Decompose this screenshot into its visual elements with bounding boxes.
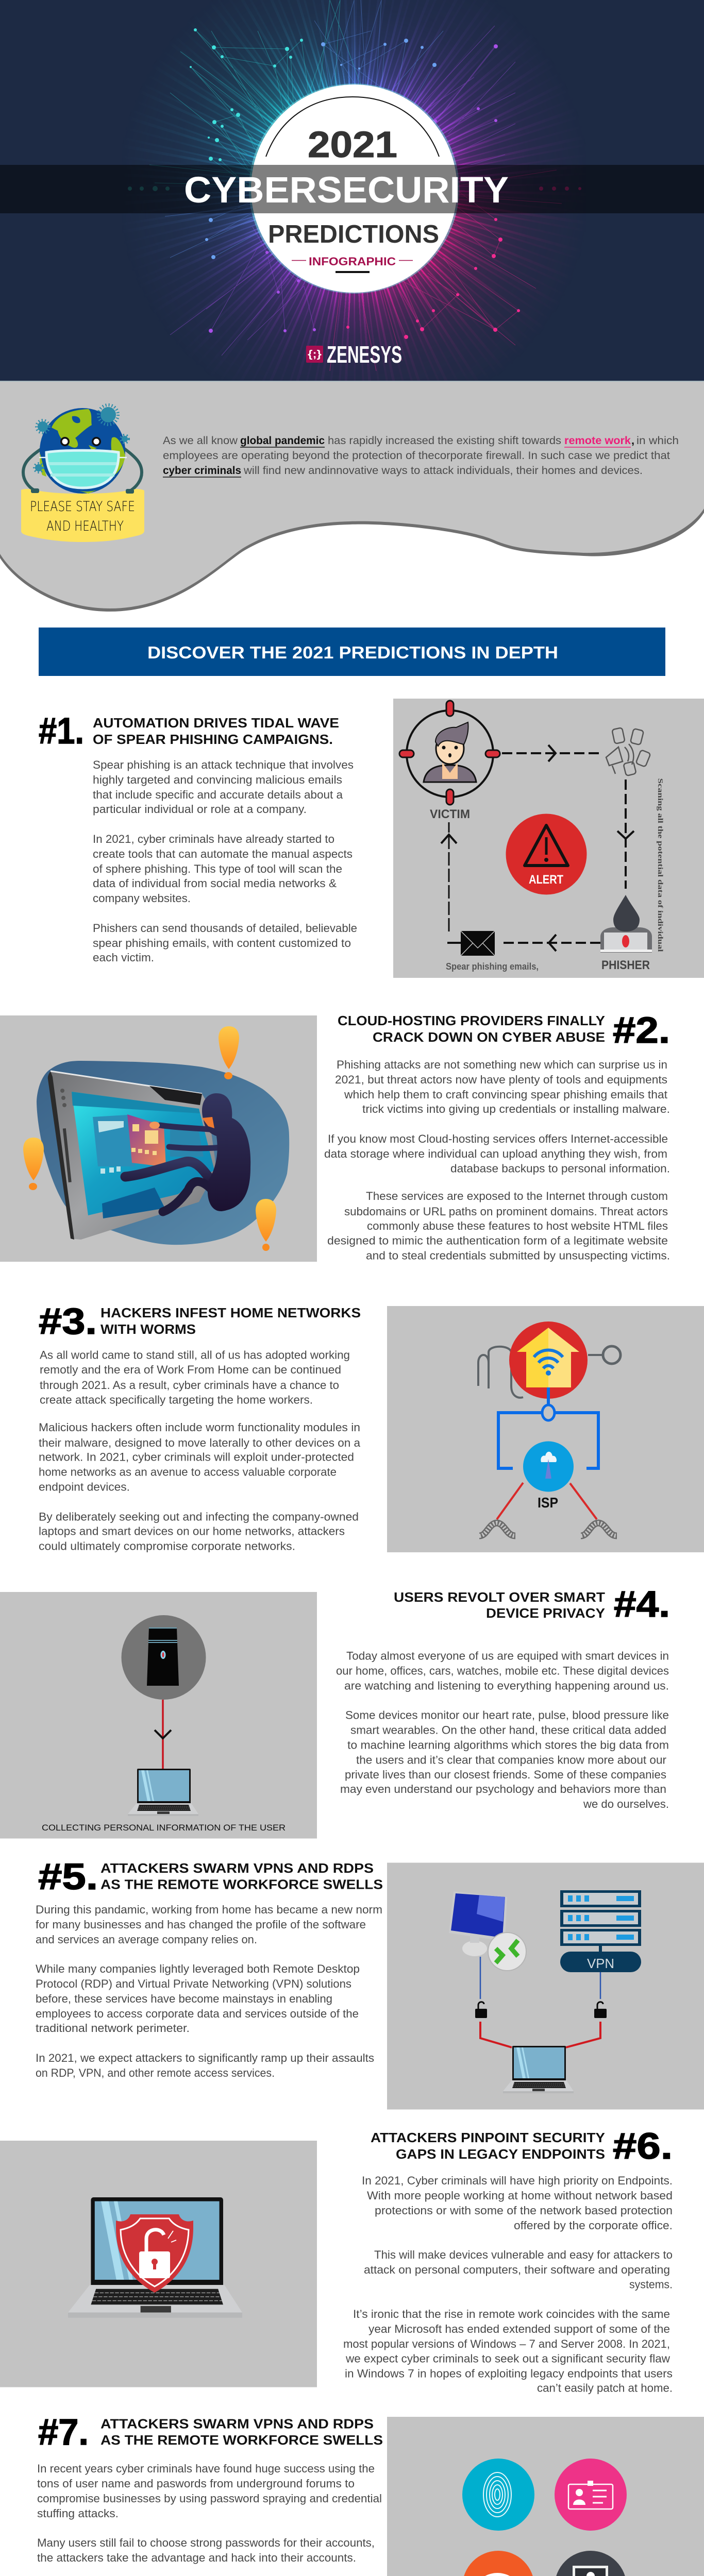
icon: victim target bbox=[399, 701, 500, 805]
hero logo bbox=[306, 341, 402, 368]
section 2 heading: CLOUD-HOSTING PROVIDERS FINALLY bbox=[338, 1013, 605, 1028]
section 4 text: Some devices monitor our heart rate, pulse, blood pressure like bbox=[345, 1709, 669, 1722]
section 5 number: #5. bbox=[38, 1857, 98, 1897]
icon: open locks bbox=[475, 2002, 607, 2018]
section 1 text: data of individual from social media networks & bbox=[93, 877, 337, 890]
panel: phishing diagram bbox=[393, 699, 704, 978]
section 1 text: create tools that can automate the manual aspects bbox=[93, 848, 353, 860]
section 7 heading: AS THE REMOTE WORKFORCE SWELLS bbox=[100, 2432, 383, 2448]
section 5 heading: ATTACKERS SWARM VPNS AND RDPS bbox=[100, 1860, 374, 1876]
panel: intro wave bbox=[0, 381, 704, 612]
infographic label: INFOGRAPHIC bbox=[309, 255, 396, 268]
section 5 text: traditional network perimeter. bbox=[36, 2022, 190, 2035]
section 6 heading: GAPS IN LEGACY ENDPOINTS bbox=[396, 2146, 605, 2162]
icon: social media megaphone bbox=[606, 727, 651, 776]
section 2 text: These services are exposed to the Internet through custom bbox=[366, 1190, 668, 1202]
section 6 text: protections or with some of the network based protection bbox=[375, 2204, 673, 2217]
section 7 text: tons of user name and paswords from underground forums to bbox=[37, 2477, 355, 2490]
section 4 heading: USERS REVOLT OVER SMART bbox=[394, 1589, 605, 1605]
section 3 heading bbox=[100, 1305, 361, 1337]
section 5 heading: AS THE REMOTE WORKFORCE SWELLS bbox=[100, 1876, 383, 1892]
section 2 text: and to steal credentials submitted by unsuspecting victims. bbox=[366, 1249, 670, 1262]
arrow: data line bbox=[155, 1700, 171, 1770]
section 1 text: Phishers can send thousands of detailed, believable bbox=[93, 922, 357, 935]
intro text: cyber criminals bbox=[163, 464, 241, 477]
section 4 text: we do ourselves. bbox=[583, 1798, 669, 1810]
section banner bbox=[39, 628, 665, 676]
section 3 text: their malware, designed to move laterally to other devices on a bbox=[39, 1436, 360, 1449]
section 5 text: While many companies lightly leveraged both Remote Desktop bbox=[36, 1962, 360, 1975]
section 1 text: Spear phishing is an attack technique that involves bbox=[93, 758, 354, 771]
section 6 text: It’s ironic that the rise in remote work coincides with the same bbox=[353, 2308, 670, 2320]
hero dark band bbox=[0, 165, 704, 213]
blob backdrop bbox=[37, 1061, 289, 1245]
hero year: 2021 bbox=[308, 125, 397, 165]
section 6 text: offered by the corporate office. bbox=[514, 2219, 673, 2232]
icon: broken shield bbox=[116, 2214, 193, 2293]
icon: alert: ALERT bbox=[529, 873, 563, 887]
icon: wifi home bbox=[509, 1321, 588, 1399]
section 4 heading: DEVICE PRIVACY bbox=[486, 1605, 605, 1621]
section 6 number: #6. bbox=[613, 2126, 673, 2167]
section 5 text: on RDP, VPN, and other remote access services. bbox=[36, 2066, 275, 2079]
icon: cables bbox=[478, 1347, 602, 1398]
section 6 text: With more people working at home without network based bbox=[367, 2189, 673, 2202]
section 1 text: company websites. bbox=[93, 892, 191, 905]
hero background with network glow bbox=[0, 0, 704, 381]
hero logo: {;} bbox=[308, 349, 322, 360]
section 7 text: the attackers take the advantage and hack into their accounts. bbox=[37, 2551, 356, 2564]
section 3 text: endpoint devices. bbox=[39, 1481, 130, 1493]
section 6 text bbox=[343, 2174, 673, 2395]
icon: masked globe with sign: PLEASE STAY SAFE bbox=[30, 499, 135, 515]
icon: exclamation marks bbox=[23, 1026, 276, 1251]
section 3 text: By deliberately seeking out and infecting the company-owned bbox=[39, 1511, 359, 1523]
panel: legacy endpoint laptop bbox=[0, 2141, 317, 2387]
intro text: , bbox=[631, 434, 634, 447]
icon: fingerprint bbox=[462, 2459, 534, 2531]
panel: authentication icons bbox=[387, 2417, 704, 2576]
section 1 text bbox=[93, 758, 357, 964]
section 5 heading bbox=[100, 1860, 383, 1892]
section 3 text: home networks as an avenue to access valuable corporate bbox=[39, 1465, 337, 1479]
section 3 text: through 2021. As a result, cyber criminals have a chance to bbox=[40, 1379, 339, 1392]
section 1 number: #1. bbox=[39, 711, 84, 752]
icon: laptop bbox=[503, 2046, 574, 2093]
section 1 text: of sphere phishing. This type of tool will scan the bbox=[93, 862, 342, 875]
arrow: phisher to email bbox=[447, 935, 600, 951]
section 4 text: the users and it’s clear that companies know more about our bbox=[356, 1754, 666, 1767]
section 4 text bbox=[336, 1650, 669, 1810]
intro text: employees are operating beyond the protection of thecorporate firewall. In such case we predict that bbox=[163, 449, 670, 462]
label: ISP: ISP bbox=[538, 1495, 558, 1511]
hero title: CYBERSECURITY bbox=[184, 170, 509, 211]
intro text: in which bbox=[636, 434, 679, 447]
section 4 text: Today almost everyone of us are equiped with smart devices in bbox=[346, 1650, 669, 1663]
panel: personal data collection bbox=[0, 1592, 317, 1838]
intro text: remote work bbox=[564, 434, 631, 447]
hero white circle bbox=[249, 83, 459, 294]
section 1 text: highly targeted and convincing malicious emails bbox=[93, 773, 342, 786]
arrow: social to phisher bbox=[617, 779, 634, 889]
icon: ISP tower bbox=[523, 1442, 574, 1492]
arrow: victim to social bbox=[502, 745, 600, 761]
section 5 text: During this pandamic, working from home has became a new norm bbox=[36, 1903, 382, 1916]
section 3 text: create attack specifically targeting the home workers. bbox=[40, 1393, 313, 1406]
worm links bbox=[497, 1483, 597, 1519]
section 2 heading bbox=[338, 1013, 605, 1045]
section 7 text: stuffing attacks. bbox=[37, 2507, 119, 2520]
section 4 text: our home, offices, cars, watches, mobile etc. These digital devices bbox=[336, 1665, 669, 1677]
intro text: As we all know bbox=[163, 434, 238, 447]
section 6 text: In 2021, Cyber criminals will have high priority on Endpoints. bbox=[362, 2174, 673, 2187]
section 1 text: that include specific and accurate details about a bbox=[93, 788, 343, 801]
section 7 heading bbox=[100, 2416, 383, 2448]
section 4 text: to machine learning algorithms which stores the big data from bbox=[347, 1739, 669, 1752]
section 5 text: and services an average company relies on. bbox=[36, 1933, 257, 1946]
icon: server tower bbox=[122, 1615, 206, 1700]
section 3 text: could ultimately compromise corporate networks. bbox=[39, 1539, 295, 1553]
icon: eye bbox=[462, 2551, 534, 2576]
section 6 text: systems. bbox=[629, 2278, 673, 2291]
section 2 text: Phishing attacks are not something new which can surprise us in bbox=[337, 1058, 667, 1071]
network burst lines and nodes bbox=[128, 0, 581, 371]
section 6 text: in Windows 7 in hopes of exploiting legacy endpoints that users bbox=[345, 2367, 673, 2380]
infographic label bbox=[292, 255, 413, 273]
icon: laptop bbox=[128, 1769, 198, 1816]
icon: worms bbox=[479, 1523, 617, 1536]
section 6 text: most popular versions of Windows – 7 and Server 2008. In 2021, bbox=[343, 2337, 670, 2350]
label: phisher: PHISHER bbox=[601, 958, 650, 972]
icon: envelope bbox=[461, 931, 495, 956]
intro text bbox=[163, 434, 679, 477]
section 6 heading bbox=[371, 2130, 605, 2162]
icon: photo ID bbox=[555, 2551, 627, 2576]
section banner: DISCOVER THE 2021 PREDICTIONS IN DEPTH bbox=[147, 643, 558, 662]
section 4 text: are watching and listening to everything happening around us. bbox=[344, 1680, 669, 1692]
section 4 text: smart wearables. On the other hand, these critical data added bbox=[350, 1724, 666, 1737]
section 2 text: data storage where individual can upload anything they wish, from bbox=[324, 1147, 667, 1160]
blue links bbox=[480, 1957, 600, 1999]
credit card bbox=[127, 1114, 166, 1167]
section 1 text: each victim. bbox=[93, 951, 154, 964]
section 2 text: 2021, but threat actors now have plenty of tools and equipments bbox=[335, 1073, 667, 1086]
section 6 text: attack on personal computers, their software and operating bbox=[364, 2263, 670, 2276]
section 2 text: subdomains or URL paths on prominent domains. Threat actors bbox=[344, 1205, 668, 1218]
label: scanning: Scaning all the potential data of individual bbox=[656, 778, 664, 952]
section 5 text: for many businesses and has changed the profile of the software bbox=[36, 1918, 366, 1931]
icon: plug bbox=[603, 1346, 621, 1364]
section 3 text bbox=[39, 1349, 360, 1553]
intro text: will find new andinnovative ways to attack individuals, their homes and devices. bbox=[243, 464, 643, 477]
arrow: email to victim bbox=[441, 822, 457, 931]
intro text: global pandemic bbox=[240, 434, 325, 447]
section 7 text: compromise businesses by using password spraying and credential bbox=[37, 2492, 382, 2505]
section 6 text: we expect cyber criminals to seek out a significant security flaw bbox=[345, 2352, 671, 2365]
network lines bbox=[498, 1387, 598, 1468]
section 2 text: database backups to personal information. bbox=[450, 1162, 670, 1175]
section 4 number: #4. bbox=[614, 1584, 670, 1625]
section 3 text: remotly and the era of Work From Home can be continued bbox=[40, 1363, 341, 1376]
section 2 text: commonly abuse these features to host website HTML files bbox=[367, 1219, 668, 1232]
section 1 heading bbox=[93, 715, 339, 747]
icon: alert bbox=[506, 814, 586, 894]
hero arc bbox=[266, 97, 439, 157]
panel: VPN and RDP diagram bbox=[387, 1863, 704, 2109]
section 1 text: spear phishing emails, with content customized to bbox=[93, 937, 351, 950]
icon: ID card bbox=[555, 2459, 627, 2531]
section 2 text: trick victims into giving up credentials or installing malware. bbox=[362, 1103, 670, 1115]
section 1 text: particular individual or role at a company. bbox=[93, 803, 307, 816]
panel: home network diagram bbox=[387, 1306, 704, 1552]
section 3 heading: HACKERS INFEST HOME NETWORKS bbox=[100, 1305, 361, 1320]
label: spear phishing emails: Spear phishing emails, bbox=[446, 961, 539, 972]
section 6 text: This will make devices vulnerable and easy for attackers to bbox=[374, 2248, 673, 2261]
section 3 text: Malicious hackers often include worm functionality modules in bbox=[39, 1421, 360, 1434]
section 2 number: #2. bbox=[613, 1010, 670, 1051]
network node bbox=[542, 1405, 555, 1420]
section 3 text: network. In 2021, cyber criminals will exploit under-protected bbox=[39, 1451, 354, 1463]
red links bbox=[480, 2022, 600, 2047]
section 4 text: private lives than our closest friends. Some of these companies bbox=[345, 1768, 666, 1781]
section 7 text: Many users still fail to choose strong passwords for their accounts, bbox=[37, 2536, 375, 2549]
intro text: has rapidly increased the existing shift towards bbox=[328, 434, 561, 447]
section 3 text: laptops and smart devices on our home networks, attackers bbox=[39, 1525, 345, 1537]
section 1 text: In 2021, cyber criminals have already started to bbox=[93, 833, 334, 845]
section 5 text: Protocol (RDP) and Virtual Private Networking (VPN) solutions bbox=[36, 1977, 351, 1990]
section 6 heading: ATTACKERS PINPOINT SECURITY bbox=[371, 2130, 605, 2145]
section 7 number: #7. bbox=[38, 2412, 89, 2453]
hero subtitle: PREDICTIONS bbox=[268, 221, 439, 248]
section 7 heading: ATTACKERS SWARM VPNS AND RDPS bbox=[100, 2416, 374, 2432]
section 2 text bbox=[324, 1058, 670, 1262]
section 2 text: designed to mimic the authentication form of a legitimate website bbox=[327, 1234, 668, 1247]
section 1 heading: AUTOMATION DRIVES TIDAL WAVE bbox=[93, 715, 339, 731]
label: collecting: COLLECTING PERSONAL INFORMATION OF THE USER bbox=[42, 1823, 286, 1833]
section 2 text: which help them to craft convincing spear phishing emails that bbox=[344, 1088, 668, 1101]
tablet bbox=[48, 1071, 216, 1240]
section 4 heading bbox=[394, 1589, 605, 1621]
icon: VPN servers bbox=[560, 1890, 641, 1972]
icon: masked globe with sign bbox=[21, 405, 144, 542]
section 3 number: #3. bbox=[39, 1301, 97, 1342]
section 3 heading: WITH WORMS bbox=[100, 1321, 196, 1337]
hacker figure bbox=[125, 1093, 250, 1212]
section 5 text: employees to access corporate data and services outside of the bbox=[36, 2007, 359, 2020]
section 5 text: In 2021, we expect attackers to significantly ramp up their assaults bbox=[36, 2052, 374, 2064]
section 7 text: In recent years cyber criminals have found huge success using the bbox=[37, 2462, 375, 2475]
section 4 text: may even understand our psychology and behaviors more than bbox=[340, 1783, 666, 1795]
panel: hacker on tablet bbox=[0, 1015, 317, 1262]
icon: remote desktop bbox=[449, 1891, 526, 1971]
icon: phisher bbox=[600, 895, 652, 953]
section 3 text: As all world came to stand still, all of us has adopted working bbox=[40, 1349, 350, 1361]
section 5 text bbox=[36, 1903, 382, 2079]
label: victim: VICTIM bbox=[430, 807, 470, 821]
icon: VPN servers: VPN bbox=[587, 1956, 614, 1971]
hero logo: ZENESYS bbox=[327, 341, 402, 368]
section 2 heading: CRACK DOWN ON CYBER ABUSE bbox=[373, 1029, 605, 1045]
section 2 text: If you know most Cloud-hosting services offers Internet-accessible bbox=[328, 1132, 668, 1145]
section 6 text: year Microsoft has ended extended support of some of the bbox=[368, 2323, 670, 2335]
section 6 text: can’t easily patch at home. bbox=[537, 2381, 673, 2395]
section 5 text: before, these services have become mainstays in enabling bbox=[36, 1992, 332, 2005]
section 7 text bbox=[37, 2462, 382, 2576]
section 1 heading: OF SPEAR PHISHING CAMPAIGNS. bbox=[93, 732, 333, 747]
icon: masked globe with sign: AND HEALTHY bbox=[46, 518, 124, 534]
